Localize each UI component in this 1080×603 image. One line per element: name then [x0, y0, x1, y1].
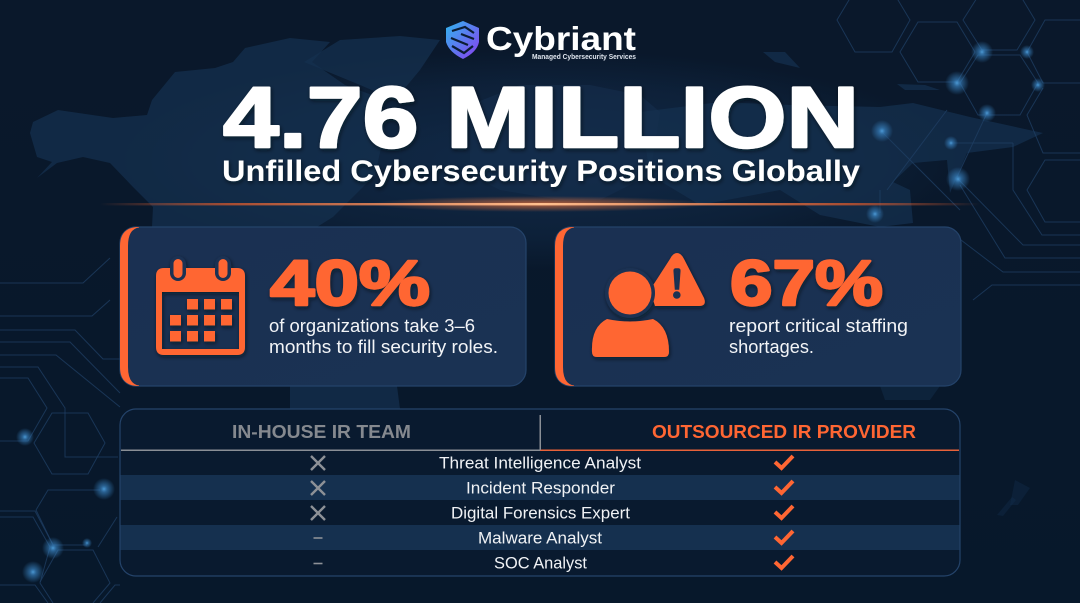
stat description: [729, 315, 908, 357]
icon: in-house status marks: [311, 456, 325, 564]
header rules: [121, 450, 540, 451]
icon: outsourced check marks: [775, 456, 793, 568]
stat description: [269, 315, 498, 357]
accent bar: [555, 227, 574, 386]
wordmark: Cybriant: [486, 20, 636, 57]
stat: 67%: 67%: [730, 247, 883, 319]
row labels: Digital Forensics Expert: [451, 504, 630, 522]
stat description: months to fill security roles.: [269, 336, 498, 357]
subtitle: Unfilled Cybersecurity Positions Globally: [222, 155, 860, 188]
column heading: in-house: IN-HOUSE IR TEAM: [232, 421, 411, 442]
logo: Cybriant: [446, 20, 636, 61]
icon: person with warning triangle: [592, 253, 705, 357]
row labels: [439, 454, 641, 572]
panel: 67% stat card: [555, 227, 961, 386]
stat description: report critical staffing: [729, 315, 908, 336]
stat description: of organizations take 3–6: [269, 315, 475, 336]
title: 4.76 MILLION: [223, 70, 859, 166]
stat description: shortages.: [729, 336, 814, 357]
accent bar: [120, 227, 139, 386]
row labels: Incident Responder: [466, 480, 616, 498]
glowing orange divider: [100, 196, 980, 212]
row labels: SOC Analyst: [494, 554, 587, 572]
panel: comparison table: [120, 409, 960, 576]
icon: calendar: [156, 256, 245, 355]
icon: shield logo: [446, 21, 479, 59]
row stripes: [120, 475, 960, 550]
stat: 40%: 40%: [270, 247, 430, 319]
world map backdrop: [30, 36, 1043, 516]
row labels: Threat Intelligence Analyst: [439, 454, 641, 472]
panel: 40% stat card: [120, 227, 526, 386]
tagline: Managed Cybersecurity Services: [532, 54, 636, 61]
row labels: Malware Analyst: [478, 530, 602, 548]
column heading: outsourced: OUTSOURCED IR PROVIDER: [652, 421, 916, 442]
